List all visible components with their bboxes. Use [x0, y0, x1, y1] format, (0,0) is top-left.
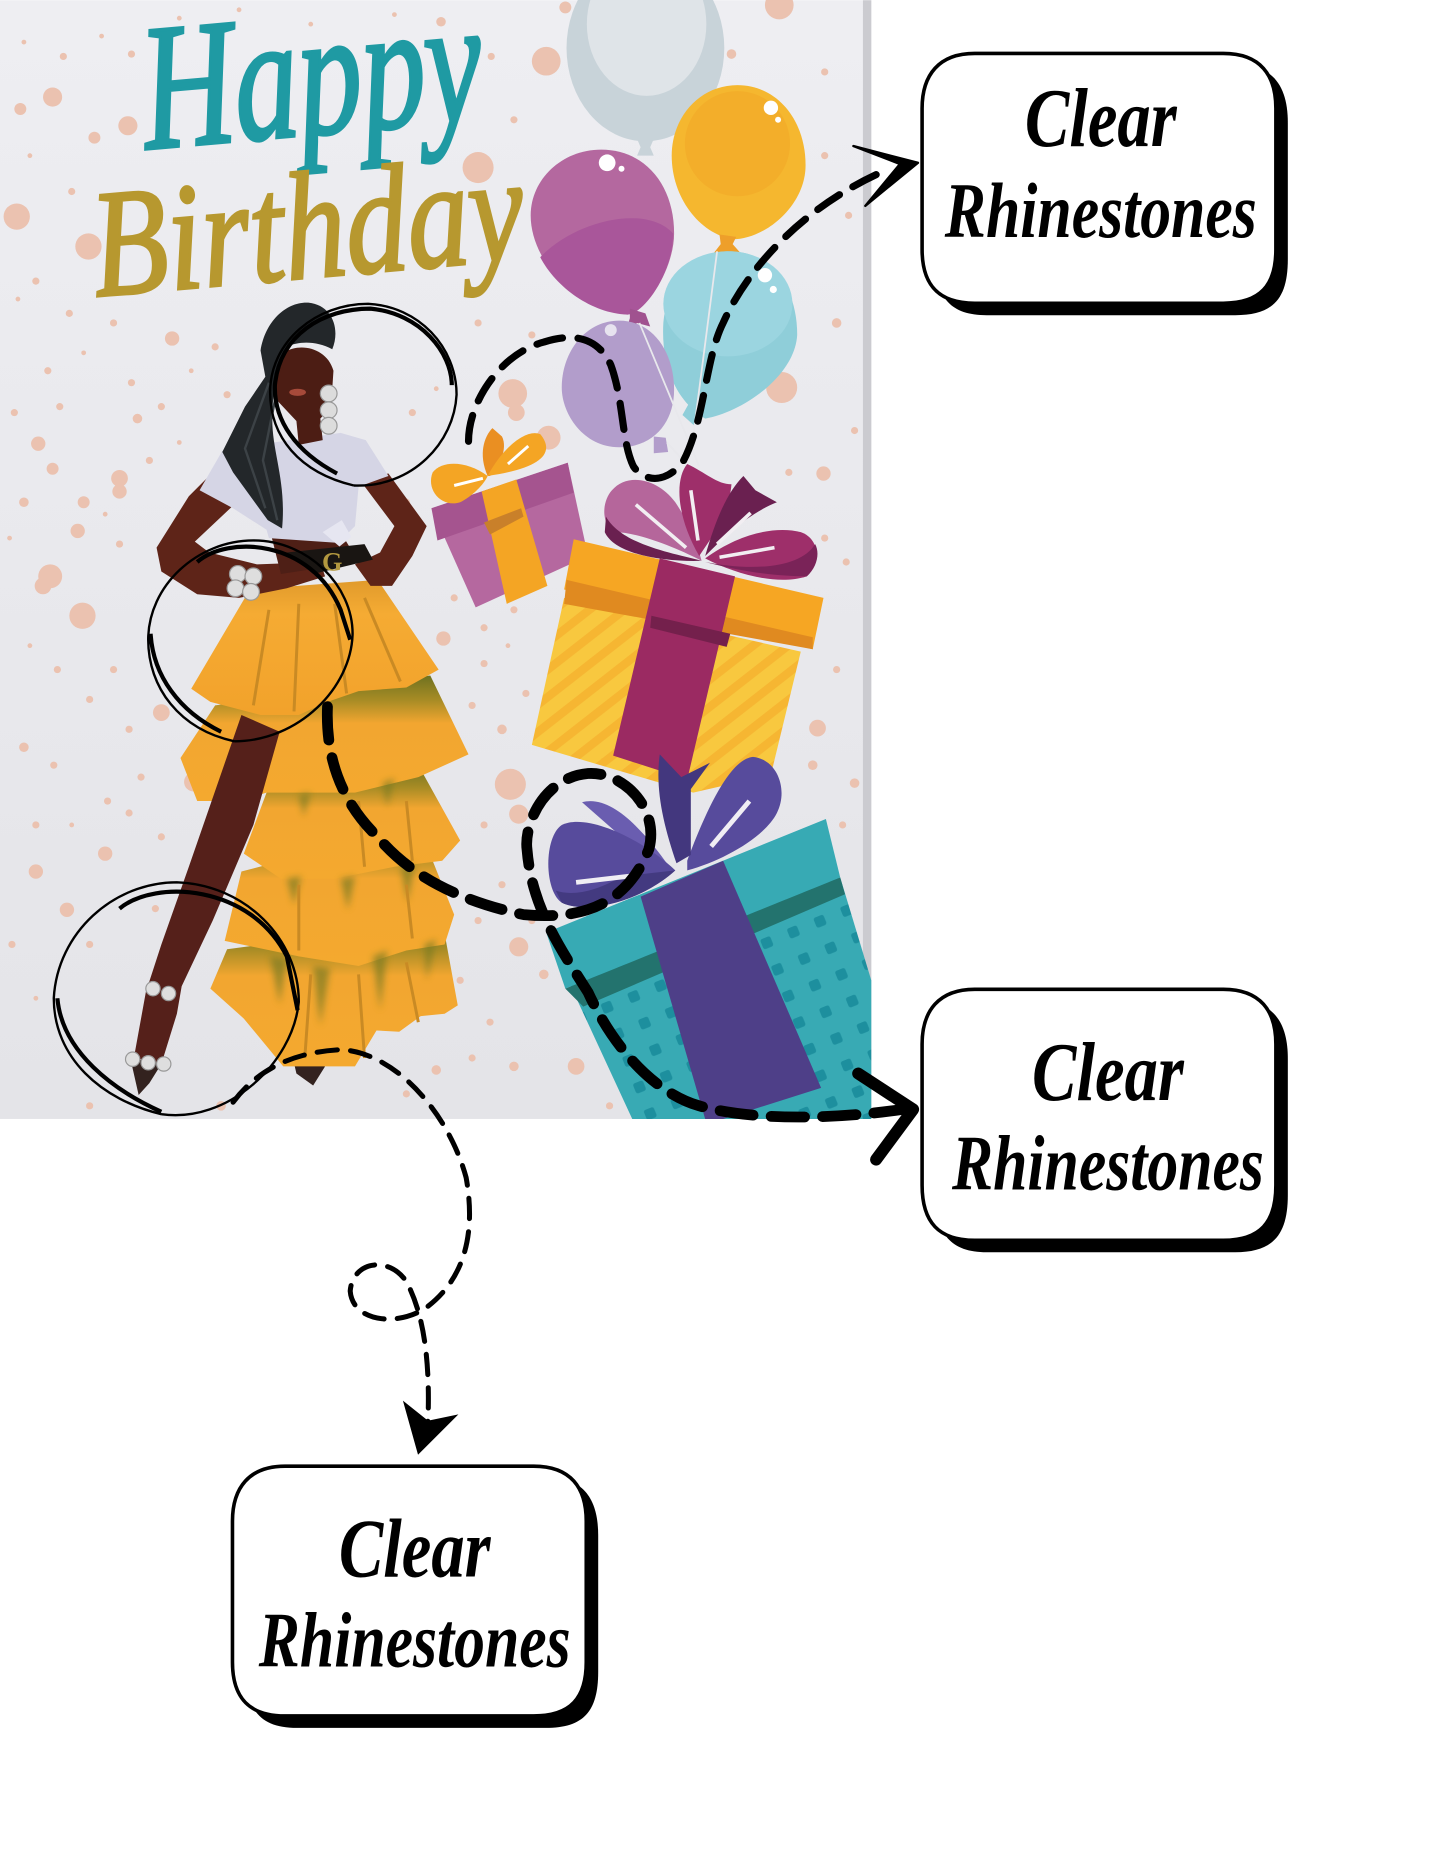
neck and face — [275, 348, 333, 445]
arms — [157, 458, 325, 598]
far shoe — [293, 1058, 325, 1085]
balloon strings — [639, 251, 717, 469]
paint splatter pattern — [4, 0, 859, 1111]
highlight ring: earring — [270, 304, 457, 486]
callout: middle right: Rhinestones — [951, 1120, 1264, 1207]
fashion figure — [125, 303, 469, 1095]
balloon: magenta — [531, 150, 674, 330]
leg — [134, 715, 280, 1064]
highlight ring: bracelet — [148, 540, 353, 741]
balloon: yellow — [672, 85, 806, 255]
lips — [289, 389, 306, 396]
dashed arrow: bracelet to right label — [327, 707, 913, 1160]
skirt pleats — [253, 598, 418, 1058]
shoe rhinestones — [125, 1052, 171, 1071]
earring rhinestones — [320, 385, 337, 434]
braid texture — [245, 383, 277, 520]
balloon: light blue — [663, 251, 797, 426]
balloons — [531, 0, 806, 469]
small pink gift — [431, 428, 588, 607]
arrowhead — [404, 1402, 457, 1454]
skirt tier 2 — [180, 676, 469, 801]
label text: Clear — [1032, 1026, 1185, 1119]
balloon: lilac — [562, 321, 674, 453]
anklet rhinestones — [146, 982, 176, 1001]
hair — [222, 303, 335, 529]
label text: Clear — [339, 1503, 492, 1596]
arrowhead — [853, 146, 918, 206]
skirt tier 4 — [225, 825, 454, 966]
bow — [431, 428, 546, 503]
belt buckle: G — [322, 547, 342, 576]
dashed arrow: earring to top label — [469, 146, 918, 478]
big yellow gift — [532, 464, 823, 793]
callout: top right — [922, 53, 1288, 315]
t-shirt — [200, 433, 388, 543]
callout: bottom — [232, 1466, 598, 1728]
torso — [269, 526, 359, 574]
skirt tier 1 — [191, 580, 439, 715]
skirt tier 3 — [244, 765, 460, 879]
label text: Clear — [1025, 72, 1178, 165]
dashed arrow: shoe to bottom label — [233, 1050, 470, 1454]
near shoe — [130, 1058, 161, 1095]
balloon: grey — [567, 0, 724, 156]
greeting card background — [0, 0, 871, 1119]
callout: bottom: Rhinestones — [258, 1597, 571, 1684]
callout: top right: Rhinestones — [944, 168, 1257, 255]
teal gift — [546, 754, 871, 1119]
bow — [548, 754, 782, 907]
belt — [287, 544, 373, 574]
arrowhead — [858, 1074, 913, 1160]
title: Birthday: Birthday — [84, 124, 530, 330]
bracelet rhinestones — [227, 566, 262, 600]
bow — [604, 464, 817, 580]
highlight ring: shoe — [54, 882, 299, 1115]
olive skirt streaks — [270, 778, 436, 1026]
callout: middle right — [922, 989, 1288, 1252]
skirt tier 5 — [210, 921, 458, 1066]
